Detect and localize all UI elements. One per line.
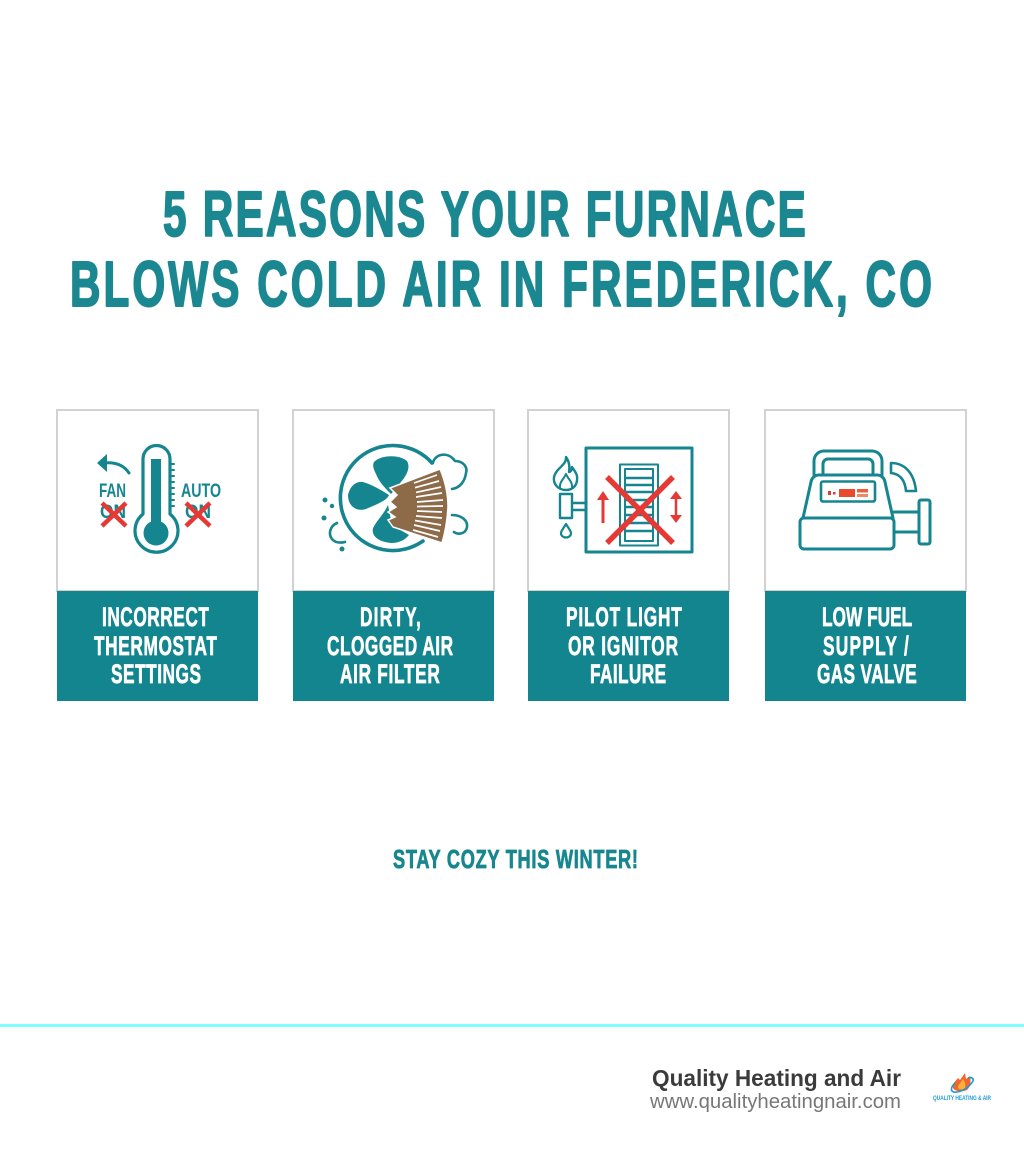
- icon: gas furnace unit with valve: [800, 451, 930, 549]
- title: [70, 179, 932, 320]
- footer company name and website: Quality Heating and Air: [652, 1065, 901, 1091]
- label: incorrect thermostat settings: [94, 601, 217, 689]
- icon: pilot light and ignitor failure: [554, 448, 692, 552]
- panel: low fuel supply / gas valve: [765, 410, 966, 701]
- label: pilot light or ignitor failure: OR IGNITOR: [568, 630, 678, 661]
- label: pilot light or ignitor failure: FAILURE: [590, 658, 666, 689]
- label: low fuel supply / gas valve: [817, 601, 917, 689]
- footer company name and website: [649, 1065, 901, 1113]
- label: incorrect thermostat settings: INCORRECT: [102, 601, 209, 632]
- icon: fan with clogged filter: [322, 446, 467, 552]
- label: pilot light or ignitor failure: [566, 601, 682, 689]
- label: dirty clogged air filter: AIR FILTER: [340, 658, 440, 689]
- icon: thermostat with crossed-out settings: FAN: [99, 481, 126, 502]
- icon: thermostat with crossed-out settings: ON: [185, 502, 211, 523]
- icon: thermostat with crossed-out settings: AUTO: [181, 481, 221, 502]
- panel: pilot light or ignitor failure: [528, 410, 729, 701]
- title: 5 REASONS YOUR FURNACE: [163, 179, 806, 250]
- label: low fuel supply / gas valve: SUPPLY /: [823, 630, 909, 661]
- tagline: STAY COZY THIS WINTER!: [393, 845, 638, 874]
- label: dirty clogged air filter: [327, 601, 453, 689]
- title: BLOWS COLD AIR IN FREDERICK, CO: [70, 249, 932, 320]
- footer company name and website: www.qualityheatingnair.com: [649, 1091, 901, 1113]
- icon: thermostat with crossed-out settings: [97, 446, 221, 552]
- icon: thermostat with crossed-out settings: ON: [100, 502, 126, 523]
- panel: dirty clogged air filter: [293, 410, 494, 701]
- label: dirty clogged air filter: CLOGGED AIR: [327, 630, 453, 661]
- label: pilot light or ignitor failure: PILOT LIGHT: [566, 601, 682, 632]
- panel: incorrect thermostat settings: [57, 410, 258, 701]
- label: incorrect thermostat settings: THERMOSTAT: [94, 630, 217, 661]
- label: low fuel supply / gas valve: GAS VALVE: [817, 658, 917, 689]
- label: dirty clogged air filter: DIRTY,: [360, 601, 421, 632]
- logo: quality heating and air: [933, 1073, 992, 1102]
- label: incorrect thermostat settings: SETTINGS: [111, 658, 201, 689]
- footer divider: [0, 1024, 1024, 1027]
- logo: quality heating and air: QUALITY HEATING & AIR: [933, 1096, 992, 1102]
- label: low fuel supply / gas valve: LOW FUEL: [822, 601, 912, 632]
